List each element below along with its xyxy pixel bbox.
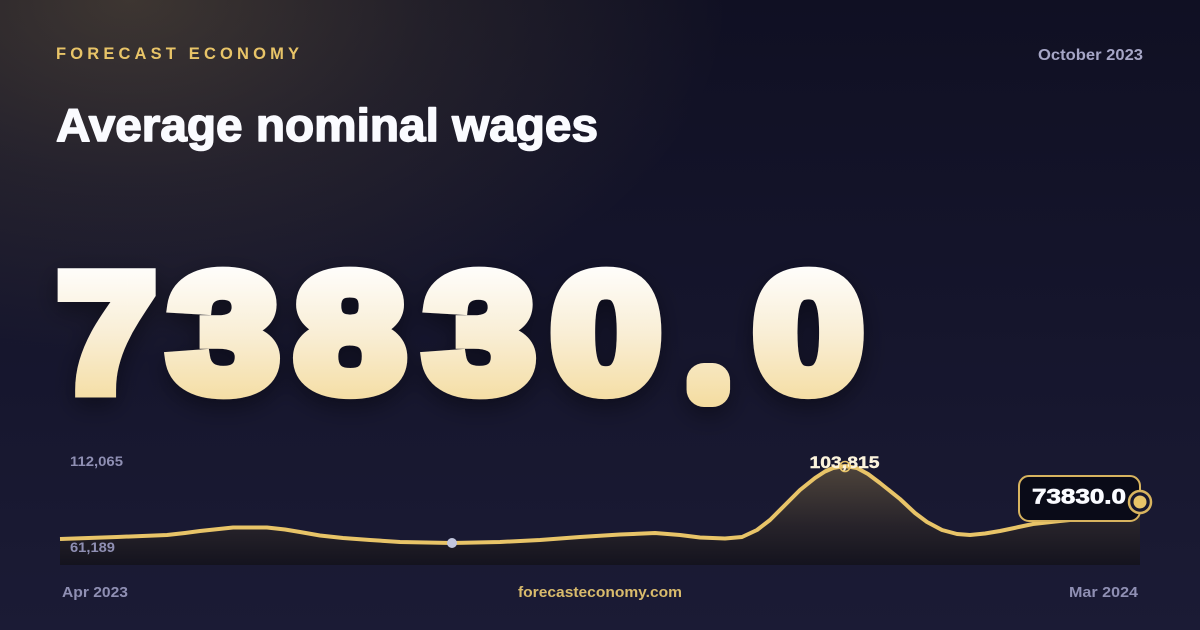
title: Average nominal wages — [56, 99, 598, 151]
current value callout: 73830.0 — [1032, 486, 1126, 508]
big value — [58, 241, 863, 426]
date: October 2023 — [1038, 47, 1143, 64]
trend line — [60, 466, 1090, 543]
end date: Mar 2024 — [1069, 584, 1139, 601]
big value: 0 — [754, 241, 863, 426]
big value: . — [700, 336, 717, 402]
current value callout — [1019, 476, 1140, 521]
start date: Apr 2023 — [62, 584, 128, 601]
area fill — [60, 466, 1140, 565]
brand label: FORECAST ECONOMY — [56, 45, 299, 63]
axis min label: 61,189 — [70, 540, 115, 555]
peak value: 103,815 — [810, 453, 880, 472]
peak marker — [840, 462, 850, 472]
big value: 3830 — [169, 241, 661, 426]
big value: 7 — [58, 241, 155, 426]
area chart — [60, 453, 1151, 565]
minimum marker — [447, 538, 457, 548]
source: forecasteconomy.com — [518, 584, 682, 601]
axis max label: 112,065 — [70, 454, 124, 469]
current marker — [1129, 491, 1151, 513]
